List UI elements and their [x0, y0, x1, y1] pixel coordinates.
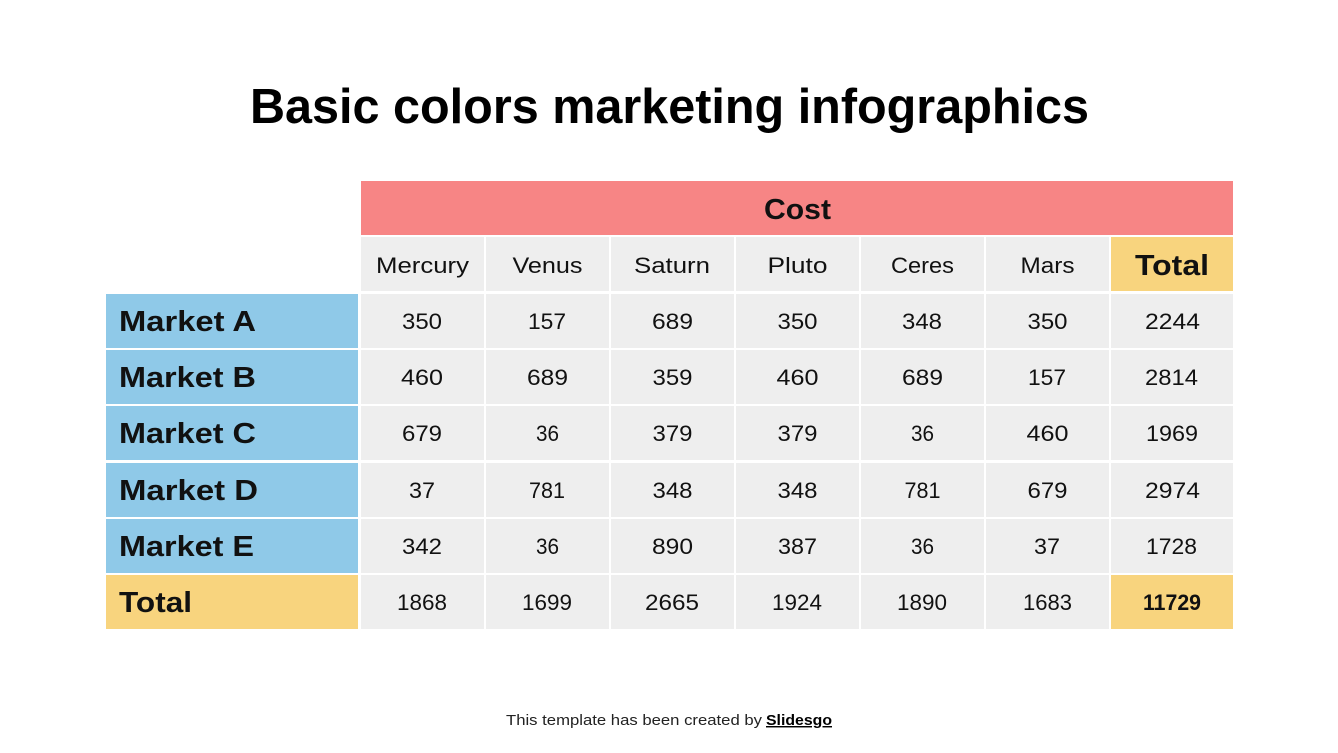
header: Cost: Cost: [764, 194, 831, 226]
row: Market E: Market E: [119, 531, 254, 563]
footer credit: [506, 713, 832, 729]
row: Market C: [106, 406, 1233, 460]
row: Market A: 350: [402, 309, 442, 334]
row: Market B: 689: [527, 365, 568, 390]
row: Total: 11729: [1143, 590, 1201, 615]
row: Market A: 689: [652, 309, 693, 334]
column headers: Pluto: [768, 253, 828, 278]
row: Market D: 781: [529, 478, 565, 503]
row: Market A: [106, 294, 1233, 348]
row: Market E: 890: [652, 534, 693, 559]
row: Market C: 379: [652, 421, 692, 446]
row: Market E: [106, 519, 1233, 573]
row: Market A: 2244: [1145, 309, 1200, 334]
column headers: Venus: [512, 253, 582, 278]
row: Market D: 348: [778, 478, 818, 503]
row: Market D: 2974: [1145, 478, 1200, 503]
row: Market C: 1969: [1146, 421, 1198, 446]
column headers: Total: [1135, 250, 1209, 282]
row: Market C: Market C: [119, 418, 256, 450]
row: Market D: Market D: [119, 475, 258, 507]
row: Total: 1924: [772, 590, 822, 615]
row: Market D: 37: [409, 478, 435, 503]
row: Market E: 36: [536, 534, 559, 559]
row: Market C: 379: [778, 421, 818, 446]
column headers: [361, 237, 1233, 291]
row: Market C: 460: [1026, 421, 1068, 446]
row: Market B: [106, 350, 1233, 404]
table: [106, 181, 1233, 629]
row: Market B: 460: [401, 365, 443, 390]
column headers: Ceres: [891, 253, 954, 278]
title: Basic colors marketing infographics: [250, 80, 1089, 134]
row: Market B: 2814: [1145, 365, 1198, 390]
row: Market A: Market A: [119, 306, 256, 338]
row: Market E: 387: [778, 534, 817, 559]
row: Market E: 36: [911, 534, 934, 559]
row: Market B: 359: [652, 365, 692, 390]
row: Total: 1868: [397, 590, 447, 615]
row: Market B: 157: [1028, 365, 1066, 390]
row: Market A: 350: [1028, 309, 1068, 334]
row: Market C: 679: [402, 421, 442, 446]
row: Total: 1699: [522, 590, 572, 615]
row: Total: 1890: [897, 590, 947, 615]
row: Market E: 1728: [1146, 534, 1197, 559]
row: Market A: 348: [902, 309, 942, 334]
row: Market B: Market B: [119, 362, 256, 394]
row: Total: 1683: [1023, 590, 1072, 615]
row: Total: Total: [119, 587, 192, 619]
row: Market D: 781: [904, 478, 940, 503]
row: Market B: 460: [776, 365, 818, 390]
row: Market A: 157: [528, 309, 566, 334]
row: Total: 2665: [645, 590, 699, 615]
row: Market E: 37: [1034, 534, 1060, 559]
row: Market C: 36: [536, 421, 559, 446]
column headers: Saturn: [634, 253, 710, 278]
row: Market E: 342: [402, 534, 442, 559]
column headers: Mercury: [376, 253, 470, 278]
row: Market D: 348: [652, 478, 692, 503]
row: Market C: 36: [911, 421, 934, 446]
row: Market B: 689: [902, 365, 943, 390]
row: Market D: 679: [1028, 478, 1068, 503]
row: Market A: 350: [778, 309, 818, 334]
row: Market D: [106, 463, 1233, 517]
column headers: Mars: [1020, 253, 1074, 278]
footer credit: Slidesgo: [766, 713, 832, 729]
footer credit: This template has been created by: [506, 713, 763, 729]
header: Cost: [361, 181, 1233, 235]
row: Total: [106, 575, 1233, 629]
